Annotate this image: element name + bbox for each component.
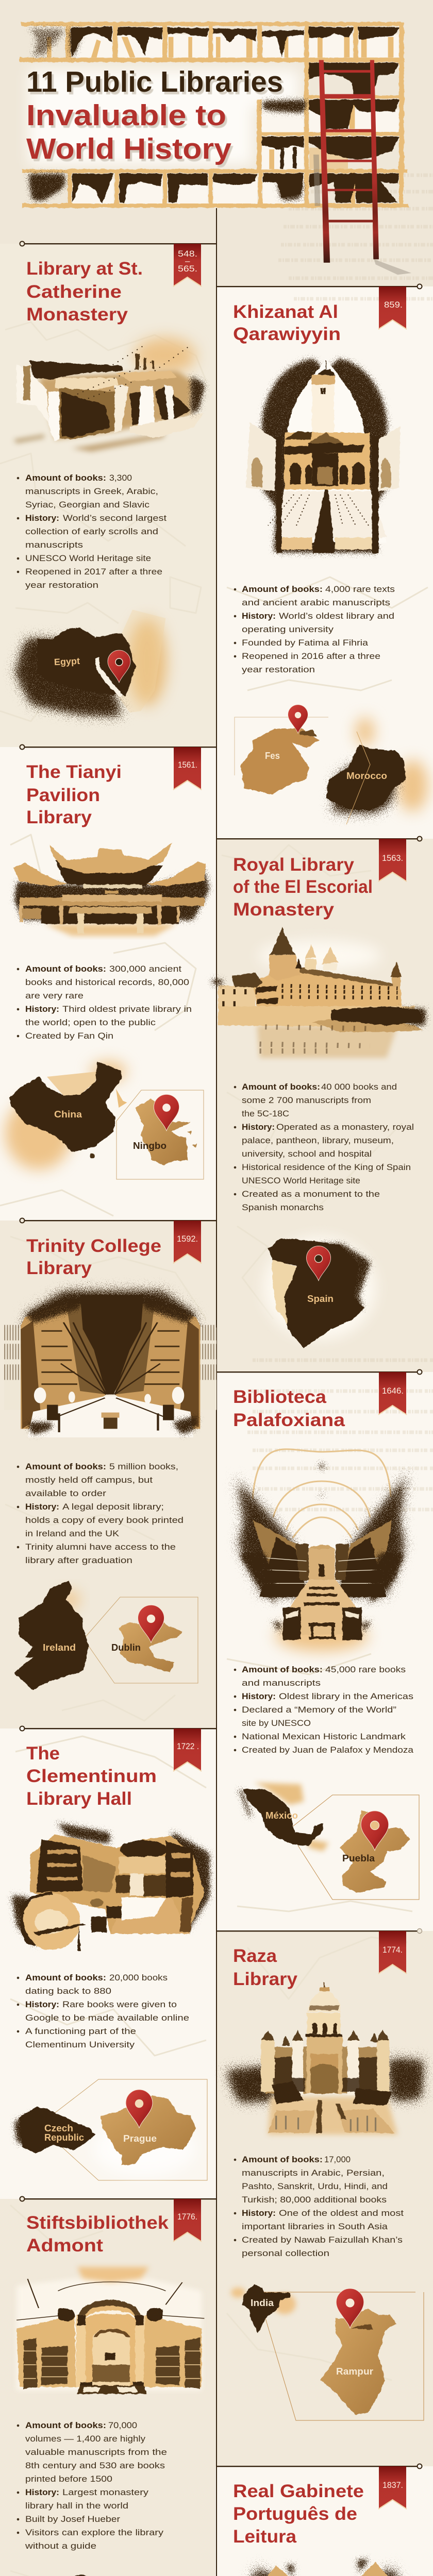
facts: Syriac, Georgian and Slavic [25, 500, 149, 510]
map: India and Rampur: India [251, 2298, 274, 2308]
title: Invaluable to [26, 99, 226, 132]
panel: Khizanat Al Qarawiyyin [216, 284, 428, 824]
facts: year restoration [25, 581, 98, 590]
heading: Admont [26, 2235, 103, 2256]
panel: The Clementinum Library Hall [11, 1726, 216, 2180]
year ribbon [378, 286, 407, 329]
facts: National Mexican Historic Landmark [242, 1732, 406, 1741]
map: Egypt: Egypt [54, 656, 80, 667]
panel: Real Gabinete Portugues de Leitura [216, 2464, 422, 2576]
map: Czech Republic and Prague [14, 2079, 207, 2180]
facts: Third oldest private library in [62, 1005, 192, 1014]
pin: Ningbo [154, 1094, 179, 1131]
facts: mostly held off campus, but [25, 1476, 153, 1485]
facts: the world; open to the public [25, 1018, 156, 1027]
facts [234, 585, 395, 674]
facts: without a guide [25, 2541, 96, 2551]
facts: Reopened in 2017 after a three [25, 567, 162, 577]
pin: Spain [306, 1246, 331, 1281]
map: China and Ningbo [5, 1061, 204, 1179]
facts: dating back to 880 [25, 1987, 111, 1996]
map: India and Rampur [231, 2284, 424, 2420]
facts: History: [242, 1123, 275, 1132]
panel: The Tianyi Pavilion Library [5, 745, 216, 1179]
timeline connector [216, 1369, 422, 1375]
facts: UNESCO World Heritage site [25, 554, 151, 563]
heading: Library [26, 1258, 92, 1278]
facts: 40 000 books and [321, 1082, 397, 1092]
year ribbon: 548. [178, 249, 197, 259]
facts: Amount of books: [25, 2421, 106, 2430]
heading: Leitura [233, 2527, 297, 2547]
heading: Clementinum [26, 1766, 157, 1786]
year ribbon: – [185, 256, 190, 266]
illustration: reading hall [238, 2559, 417, 2576]
shelf book shadows [71, 27, 399, 202]
facts: A functioning part of the [25, 2027, 136, 2036]
facts: valuable manuscripts from the [25, 2448, 167, 2457]
facts [17, 964, 192, 1041]
illustration: library hall [235, 1449, 409, 1651]
facts: Google to be made available online [25, 2013, 189, 2023]
facts: some 2 700 manuscripts from [242, 1096, 371, 1105]
timeline connector [20, 241, 216, 246]
facts: manuscripts [25, 540, 83, 550]
facts: Declared a “Memory of the World” [242, 1705, 396, 1715]
bookshelf frame [19, 22, 409, 208]
facts [17, 2421, 167, 2551]
heading: Pavilion [26, 785, 100, 805]
year ribbon: 859. [384, 300, 403, 310]
facts: university, school and hospital [242, 1149, 372, 1159]
year ribbon: 1561. [178, 760, 197, 770]
header illustration: bookshelves and ladder [19, 22, 411, 275]
map: Fes and Morocco: Morocco [346, 771, 387, 781]
heading: Catherine [26, 282, 122, 302]
ladder [313, 60, 411, 275]
facts: Amount of books: [242, 2155, 323, 2164]
year ribbon: 1722 . [177, 1741, 199, 1751]
year ribbon [173, 1221, 202, 1263]
facts: History: [242, 612, 276, 621]
facts: Amount of books: [242, 1665, 323, 1674]
facts [17, 1973, 189, 2049]
year ribbon [378, 1372, 407, 1415]
heading: Khizanat Al [233, 302, 338, 322]
heading [233, 2481, 364, 2547]
illustration: Long Room [4, 1290, 216, 1437]
facts: Amount of books: [242, 1082, 320, 1092]
heading: The [26, 1743, 60, 1764]
facts: Amount of books: [25, 1973, 106, 1982]
heading: Palafoxiana [233, 1410, 345, 1430]
heading: Library at St. [26, 259, 143, 279]
heading [233, 302, 341, 344]
illustration: baroque hall [16, 2267, 204, 2394]
heading: Library [26, 807, 92, 827]
panel: Royal Library of the El Escorial Monastery [210, 837, 427, 1348]
facts: History: [242, 1692, 276, 1701]
year ribbon [378, 2466, 407, 2509]
heading: Library [233, 1969, 298, 1989]
pin: Egypt [108, 650, 130, 683]
facts: and manuscripts [242, 1679, 321, 1688]
facts: operating university [242, 625, 334, 634]
year ribbon [173, 747, 202, 790]
facts: 300,000 ancient [109, 964, 181, 974]
facts: Created by Juan de Palafox y Mendoza [242, 1745, 414, 1755]
heading [233, 855, 373, 920]
facts: Amount of books: [242, 585, 323, 594]
panel: Stiftsbibliothek Admont [16, 2197, 216, 2576]
heading: Qarawiyyin [233, 324, 341, 344]
map: India and Rampur: Rampur [336, 2366, 373, 2377]
year ribbon [378, 1931, 407, 1974]
facts: Created by Nawab Faizullah Khan’s [242, 2235, 403, 2245]
facts: palace, pantheon, library, museum, [242, 1136, 394, 1145]
facts: 3,300 [109, 473, 132, 483]
illustration: palace [224, 1982, 425, 2134]
facts: UNESCO World Heritage site [242, 1176, 360, 1185]
map: Mexico and Puebla: México [265, 1810, 298, 1821]
facts: collection of early scrolls and [25, 527, 158, 536]
map: Ireland and Dublin [14, 1581, 198, 1690]
year ribbon: 565. [178, 264, 197, 274]
facts: World’s oldest library and [279, 612, 394, 621]
facts: Amount of books: [25, 1462, 106, 1471]
facts: Historical residence of the King of Spain [242, 1163, 411, 1172]
facts: available to order [25, 1489, 107, 1498]
facts: Trinity alumni have access to the [25, 1543, 176, 1552]
heading: of the El Escorial [233, 877, 373, 897]
facts: Created as a monument to the [242, 1190, 380, 1199]
facts: 8th century and 530 are books [25, 2461, 165, 2470]
panel: Raza Library [216, 1929, 425, 2420]
map: China and Ningbo: Ningbo [133, 1141, 166, 1151]
facts: site by UNESCO [242, 1719, 311, 1728]
facts: are very rare [25, 991, 84, 1001]
facts: Amount of books: [25, 473, 106, 483]
heading [26, 762, 122, 827]
map: Egypt [14, 609, 166, 718]
year ribbon [173, 2199, 202, 2242]
pin: Dublin [138, 1605, 164, 1642]
facts: Clementinum University [25, 2040, 135, 2049]
facts: History: [25, 2000, 59, 2009]
panel: Trinity College Library [4, 1218, 216, 1690]
facts: manuscripts in Arabic, Persian, [242, 2168, 385, 2178]
facts: Reopened in 2016 after a three [242, 652, 380, 661]
year ribbon [173, 244, 202, 286]
year ribbon: 1592. [177, 1234, 198, 1244]
facts: A legal deposit library; [62, 1502, 164, 1512]
heading: Royal Library [233, 855, 355, 875]
title: World History [26, 132, 231, 165]
timeline connector [216, 1929, 422, 1933]
panel: Library at St. Catherine Monastery [14, 241, 216, 718]
heading [26, 1236, 161, 1278]
heading [26, 259, 143, 325]
heading: The Tianyi [26, 762, 122, 782]
facts: Built by Josef Hueber [25, 2515, 121, 2524]
facts: World’s second largest [63, 514, 166, 523]
map: Czech Republic and Prague: Republic [44, 2132, 84, 2143]
map: China and Ningbo: China [54, 1109, 82, 1120]
timeline connector [216, 2464, 422, 2469]
facts: Operated as a monastery, royal [276, 1123, 414, 1132]
illustration: arch and courtyard [246, 358, 401, 553]
sprayed shelf edges [28, 27, 309, 201]
timeline connector [20, 2197, 216, 2201]
heading [233, 1387, 345, 1430]
facts: 5 million books, [109, 1462, 178, 1471]
map: Ireland and Dublin: Ireland [43, 1642, 76, 1653]
timeline connector [20, 1726, 216, 1731]
facts: 45,000 rare books [325, 1665, 406, 1674]
map: Fes and Morocco: Fes [265, 751, 280, 761]
timeline connector [216, 284, 422, 289]
heading: Trinity College [26, 1236, 161, 1256]
map: Czech Republic and Prague: Czech [44, 2123, 73, 2133]
facts: Rare books were given to [62, 2000, 177, 2009]
pin: Prague [126, 2090, 153, 2128]
year ribbon [378, 839, 407, 882]
facts: books and historical records, 80,000 [25, 978, 189, 987]
illustration: El Escorial [210, 927, 427, 1058]
facts: year restoration [242, 665, 315, 674]
map: Mexico and Puebla: Puebla [342, 1853, 375, 1863]
map: Spain: Spain [307, 1294, 334, 1304]
facts: Spanish monarchs [242, 1203, 324, 1212]
heading [26, 2213, 169, 2256]
facts: 70,000 [108, 2421, 137, 2430]
facts: History: [25, 1502, 59, 1512]
facts: 20,000 books [109, 1973, 168, 1982]
facts: volumes — 1,400 are highly [25, 2434, 146, 2444]
heading [233, 1946, 298, 1989]
facts: Turkish; 80,000 additional books [242, 2195, 387, 2205]
facts: Oldest library in the Americas [279, 1692, 413, 1701]
facts: holds a copy of every book printed [25, 1516, 184, 1525]
facts: History: [25, 1005, 59, 1014]
map: Czech Republic and Prague: Prague [123, 2133, 157, 2144]
facts: library hall in the world [25, 2501, 128, 2511]
year ribbon: 1774. [382, 1945, 403, 1955]
facts: manuscripts in Greek, Arabic, [25, 487, 158, 496]
facts [17, 1462, 184, 1565]
map: Mexico and Puebla [238, 1783, 419, 1900]
facts: Largest monastery [62, 2488, 149, 2497]
heading: Stiftsbibliothek [26, 2213, 169, 2233]
heading: Biblioteca [233, 1387, 327, 1407]
heading [26, 1743, 157, 1809]
facts: History: [242, 2209, 276, 2218]
heading: Library Hall [26, 1789, 132, 1809]
map: Fes and Morocco [235, 705, 428, 824]
facts: Created by Fan Qin [25, 1031, 113, 1041]
timeline connector [20, 1218, 216, 1223]
facts: the 5C-18C [242, 1109, 289, 1118]
pin: Fes [288, 705, 308, 733]
title [26, 65, 283, 165]
heading: Raza [233, 1946, 277, 1966]
pin: Rampur [336, 2289, 364, 2328]
heading: Real Gabinete [233, 2481, 364, 2501]
facts [234, 2155, 404, 2258]
illustration: pavilion [14, 842, 210, 936]
heading: Português de [233, 2504, 357, 2524]
facts: History: [25, 2488, 59, 2497]
title: 11 Public Libraries [26, 65, 283, 98]
facts [234, 1082, 414, 1212]
year ribbon: 1646. [382, 1386, 404, 1396]
facts [17, 473, 166, 590]
illustration: monastery [14, 337, 206, 452]
facts: library after graduation [25, 1556, 132, 1565]
year ribbon: 1837. [382, 2480, 403, 2490]
pin: Puebla [361, 1811, 389, 1851]
map: Ireland and Dublin: Dublin [111, 1642, 141, 1653]
facts: Amount of books: [25, 964, 106, 974]
heading: Monastery [26, 304, 128, 325]
timeline connector [20, 745, 216, 749]
facts: Visitors can explore the library [25, 2528, 164, 2537]
illustration: hall with globe [11, 1822, 210, 1951]
facts: printed before 1500 [25, 2475, 112, 2484]
year ribbon: 1776. [177, 2212, 197, 2222]
facts [234, 1665, 414, 1755]
panel: Biblioteca Palafoxiana [216, 1369, 422, 1900]
map: Austria and Admont [24, 2574, 200, 2576]
facts: History: [25, 514, 59, 523]
facts: in Ireland and the UK [25, 1529, 119, 1538]
facts: Founded by Fatima al Fihria [242, 638, 369, 648]
heading: Monastery [233, 900, 335, 920]
timeline: central vertical line [216, 208, 217, 2576]
facts: 17,000 [324, 2155, 351, 2164]
facts: personal collection [242, 2249, 329, 2258]
facts: important libraries in South Asia [242, 2222, 388, 2231]
facts: Pashto, Sanskrit, Urdu, Hindi, and [242, 2182, 388, 2191]
year ribbon: 1563. [382, 853, 403, 863]
timeline connector [216, 837, 422, 841]
facts: One of the oldest and most [279, 2209, 404, 2218]
shelf books [47, 35, 399, 204]
year ribbon [173, 1728, 202, 1771]
white glow behind the title [28, 70, 299, 165]
facts: and ancient arabic manuscripts [242, 598, 390, 607]
facts: 4,000 rare texts [325, 585, 395, 594]
map: Spain [263, 1236, 376, 1348]
